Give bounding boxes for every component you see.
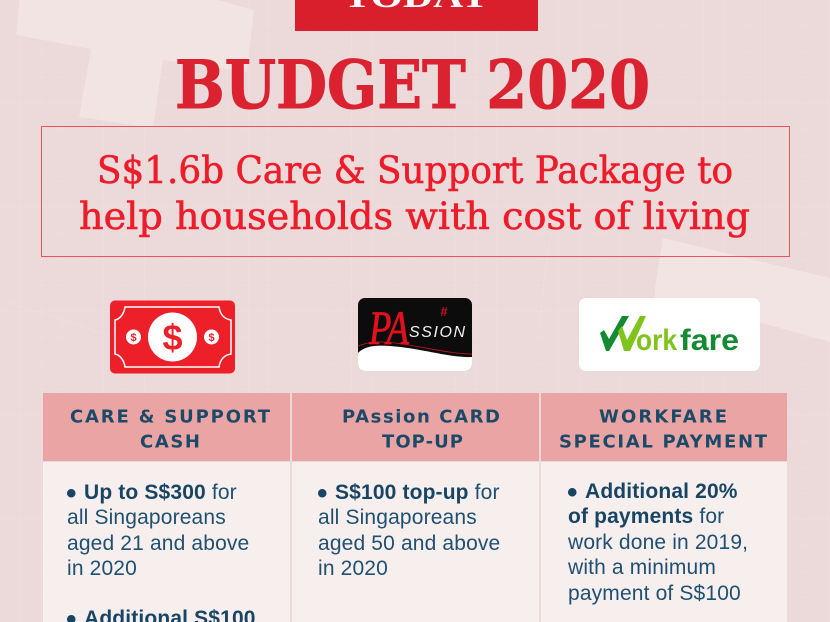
title: BUDGET 2020 xyxy=(175,46,650,124)
text: PAssion details: for xyxy=(469,481,500,504)
logo: PAssion card: # xyxy=(440,304,448,319)
text: workfare details: • xyxy=(567,476,578,509)
icon: banknote xyxy=(110,300,235,374)
text: care and support details: all Singaporeans xyxy=(67,506,226,529)
subtitle box: help households with cost of living xyxy=(79,195,750,238)
icon: banknote: $ xyxy=(130,332,137,344)
logo: Workfare xyxy=(579,298,760,371)
logo: PAssion card: SSION xyxy=(409,324,465,341)
logo: Workfare: fare xyxy=(680,324,739,357)
logo: TODAY banner xyxy=(295,0,538,31)
text: workfare details: for xyxy=(693,505,724,528)
heading: care and support cash: CASH xyxy=(140,432,200,452)
subtitle box: S$1.6b Care & Support Package to xyxy=(97,149,733,192)
text: PAssion details: aged 50 and above xyxy=(318,532,500,555)
text: PAssion details: S$100 top-up xyxy=(335,481,469,504)
heading: care and support cash: CARE & SUPPORT xyxy=(70,406,271,428)
text: care and support details: in 2020 xyxy=(67,557,137,580)
logo: PAssion card: PA xyxy=(368,302,410,355)
panel: workfare special payment xyxy=(541,393,787,622)
text: workfare details: work done in 2019, xyxy=(567,531,748,554)
text: PAssion details: in 2020 xyxy=(318,557,388,580)
text: care and support details: • xyxy=(66,477,77,510)
heading: workfare special payment: SPECIAL PAYMENT xyxy=(559,432,768,452)
heading: PAssion card top-up: PAssion CARD xyxy=(342,406,500,428)
logo: Workfare: ork xyxy=(636,324,677,357)
text: workfare details: of payments xyxy=(568,505,693,528)
heading: workfare special payment: WORKFARE xyxy=(599,406,727,428)
text: workfare details: Additional 20% xyxy=(585,480,738,503)
text: care and support details: aged 21 and above xyxy=(67,532,249,555)
icon: banknote: $ xyxy=(162,317,183,358)
text: workfare details: payment of S$100 xyxy=(568,582,741,605)
text: PAssion details: • xyxy=(317,477,328,510)
panel: PAssion card top-up xyxy=(292,393,539,622)
text: care and support details: for xyxy=(206,481,237,504)
text: workfare details: with a minimum xyxy=(567,556,716,579)
text: care and support details: Up to S$300 xyxy=(84,481,206,504)
subtitle box xyxy=(42,126,790,256)
heading: PAssion card top-up: TOP-UP xyxy=(382,432,463,452)
text: PAssion details: all Singaporeans xyxy=(318,506,477,529)
panel: care and support cash xyxy=(43,393,290,622)
logo: PAssion card xyxy=(358,298,472,371)
icon: banknote: $ xyxy=(208,332,215,344)
